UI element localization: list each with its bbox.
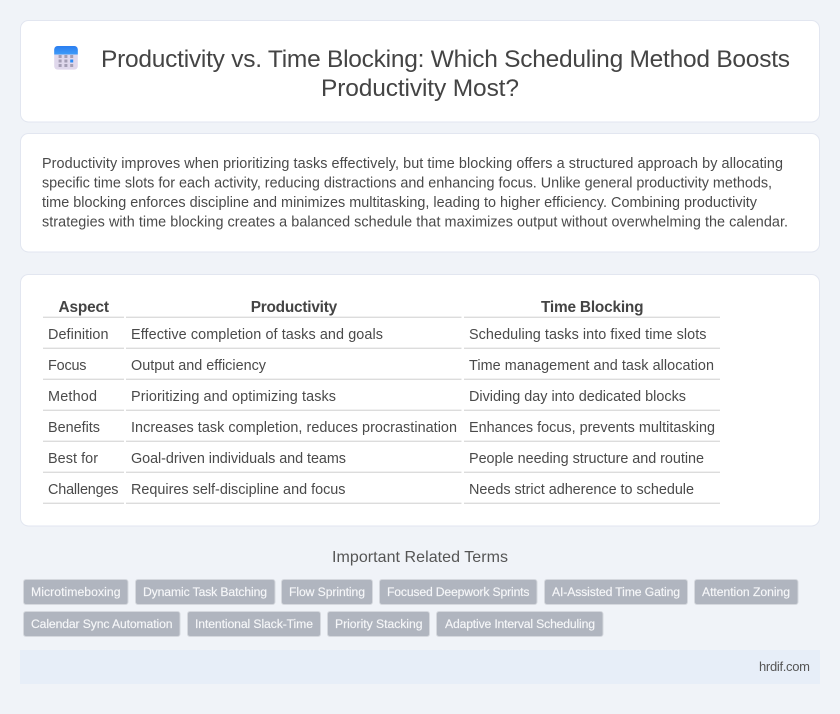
text block: intro paragraph: strategies with time blocking creates a balanced schedule that maximizes output without overwhelming the calendar. xyxy=(42,214,788,230)
tag: Focused Deepwork Sprints: Focused Deepwork Sprints xyxy=(387,585,530,599)
tag: Dynamic Task Batching xyxy=(136,580,275,604)
row: challenges: Needs strict adherence to schedule xyxy=(469,482,694,498)
text block: intro paragraph: specific time slots for each activity, reducing distractions and enhancing focus. Unlike general productivity methods, xyxy=(42,176,772,192)
row: benefits: Benefits xyxy=(48,420,100,436)
tag: Adaptive Interval Scheduling: Adaptive Interval Scheduling xyxy=(445,617,595,631)
row: challenges: Challenges xyxy=(48,482,118,498)
footer xyxy=(20,650,820,684)
row: benefits: Increases task completion, reduces procrastination xyxy=(131,420,457,436)
tag: Calendar Sync Automation: Calendar Sync Automation xyxy=(31,617,172,631)
row: best for: Goal-driven individuals and teams xyxy=(131,451,346,467)
table header: Time Blocking xyxy=(541,299,644,316)
tag: Microtimeboxing xyxy=(24,580,128,604)
row: method: Prioritizing and optimizing tasks xyxy=(131,389,336,405)
tag: Priority Stacking: Priority Stacking xyxy=(335,617,422,631)
row: benefits xyxy=(43,420,720,442)
row: challenges xyxy=(43,482,720,504)
tag: Calendar Sync Automation xyxy=(24,612,180,636)
tag: Attention Zoning xyxy=(694,580,798,604)
row: focus: Focus xyxy=(48,358,86,374)
text block: intro paragraph xyxy=(42,156,788,230)
row: focus xyxy=(43,358,720,380)
tag: AI-Assisted Time Gating xyxy=(544,580,688,604)
row: best for xyxy=(43,451,720,473)
table header xyxy=(43,299,720,318)
related term tags xyxy=(24,580,798,636)
tag: Focused Deepwork Sprints xyxy=(380,580,537,604)
tag: Flow Sprinting: Flow Sprinting xyxy=(289,585,365,599)
panel: title xyxy=(20,20,820,122)
table header: Productivity xyxy=(251,299,338,316)
row: challenges: Requires self-discipline and focus xyxy=(131,482,346,498)
tag: Flow Sprinting xyxy=(282,580,372,604)
row: benefits: Enhances focus, prevents multitasking xyxy=(469,420,715,436)
row: focus: Output and efficiency xyxy=(131,358,267,374)
row: method: Method xyxy=(48,389,97,405)
table header: Aspect xyxy=(58,299,109,316)
tag: AI-Assisted Time Gating: AI-Assisted Time Gating xyxy=(552,585,680,599)
row: best for: Best for xyxy=(48,451,98,467)
tag: Attention Zoning: Attention Zoning xyxy=(702,585,790,599)
tag: Dynamic Task Batching: Dynamic Task Batching xyxy=(143,585,267,599)
text block: intro paragraph: Productivity improves when prioritizing tasks effectively, but time blocking offers a structured approach by allocating xyxy=(42,156,783,172)
heading: related terms: Important Related Terms xyxy=(332,549,508,566)
tag: Intentional Slack-Time: Intentional Slack-Time xyxy=(195,617,313,631)
row: definition: Scheduling tasks into fixed time slots xyxy=(469,327,706,343)
tag: Intentional Slack-Time xyxy=(188,612,320,636)
row: definition: Definition xyxy=(48,327,108,343)
row: focus: Time management and task allocation xyxy=(469,358,714,374)
row: definition xyxy=(43,327,720,349)
heading xyxy=(101,46,790,102)
tag: Priority Stacking xyxy=(328,612,430,636)
icon: calendar xyxy=(54,46,78,70)
tag: Adaptive Interval Scheduling xyxy=(436,612,603,636)
row: method xyxy=(43,389,720,411)
heading: Productivity vs. Time Blocking: Which Scheduling Method Boosts xyxy=(101,46,790,73)
text block: intro paragraph: time blocking enforces discipline and minimizes multitasking, leading to higher efficiency. Combining productivity xyxy=(42,195,758,211)
footer: hrdif.com xyxy=(759,659,810,674)
row: best for: People needing structure and routine xyxy=(469,451,704,467)
heading: Productivity Most? xyxy=(321,75,519,102)
panel: introduction xyxy=(20,134,820,252)
row: definition: Effective completion of tasks and goals xyxy=(131,327,383,343)
tag: Microtimeboxing: Microtimeboxing xyxy=(31,585,120,599)
row: method: Dividing day into dedicated blocks xyxy=(469,389,686,405)
panel: comparison table xyxy=(20,274,820,526)
